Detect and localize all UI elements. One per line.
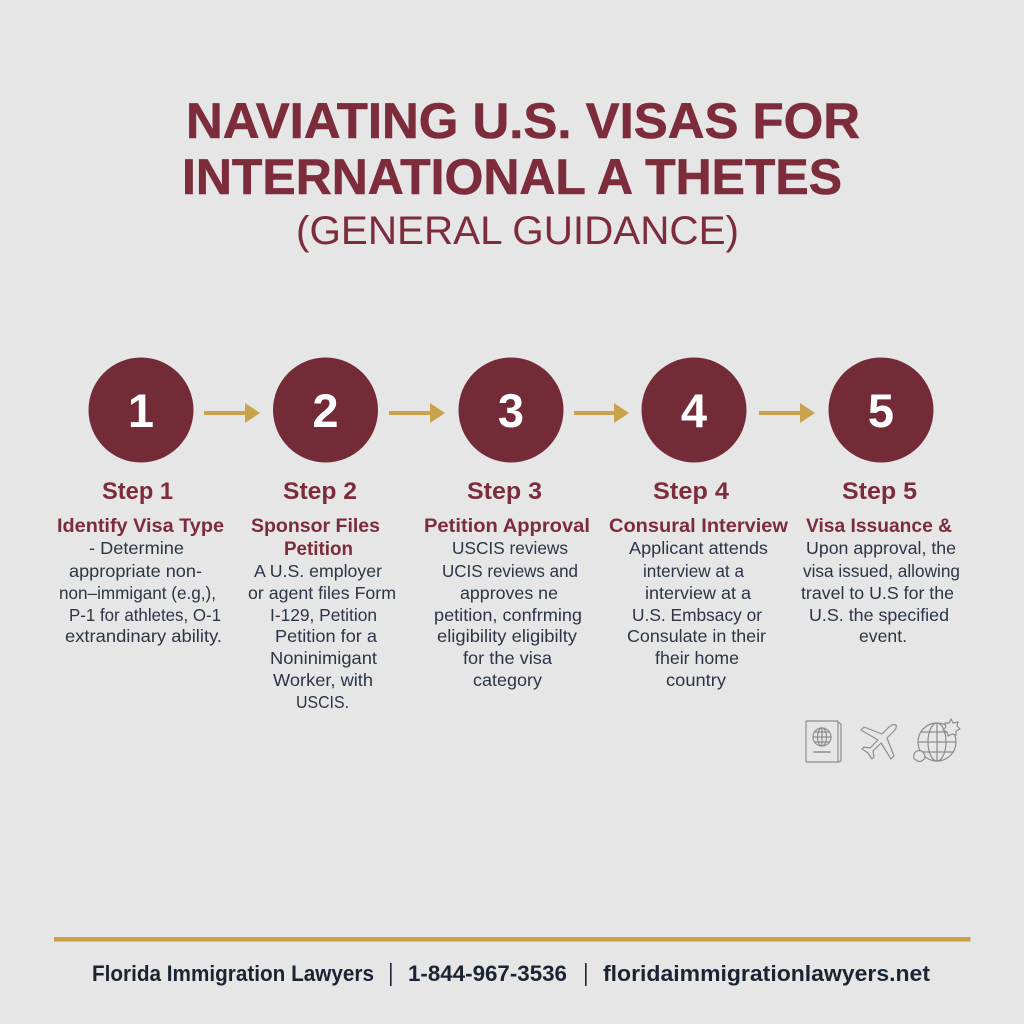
step 2 text: [248, 478, 396, 712]
step 2 text: or agent files Form: [248, 583, 396, 603]
icon: passport: [806, 721, 841, 762]
title: INTERNATIONAL A THETES: [182, 149, 842, 205]
step 3 text: eligibility eligibilty: [437, 626, 577, 646]
step 2 text: Sponsor Files: [251, 515, 380, 537]
step 4 text: interview at a: [643, 561, 744, 581]
step 3 text: category: [473, 670, 542, 690]
step 1 text: Identify Visa Type: [57, 515, 224, 537]
step 4 text: fheir home: [655, 648, 739, 668]
step 4 text: country: [666, 670, 726, 690]
step 5 text: [801, 478, 960, 646]
step 1 text: non–immigant (e.g,),: [59, 583, 216, 603]
step 5 text: travel to U.S for the: [801, 583, 954, 603]
footer contact line: 1-844-967-3536: [408, 961, 567, 986]
footer rule: [54, 937, 970, 942]
step 2 text: Petition: [284, 538, 353, 560]
step 1 text: [57, 478, 224, 646]
step 5 text: Visa Issuance &: [806, 515, 952, 537]
step 2 text: I-129, Petition: [270, 605, 377, 625]
step 1 text: appropriate non-: [69, 561, 202, 581]
icon: airplane: [861, 725, 896, 759]
title: NAVIATING U.S. VISAS FOR: [186, 93, 860, 149]
footer contact line: Florida Immigration Lawyers: [92, 961, 374, 986]
step number circles: 1: [128, 384, 154, 437]
subtitle: (GENERAL GUIDANCE): [296, 209, 739, 253]
step 1 text: - Determine: [89, 538, 184, 558]
step 2 text: Noninimigant: [270, 648, 377, 668]
step 5 text: U.S. the specified: [809, 605, 949, 625]
step number circles: 5: [868, 384, 894, 437]
step 3 text: petition, confrming: [434, 605, 582, 625]
step 3 text: approves ne: [460, 583, 558, 603]
step 1 text: extrandinary ability.: [65, 626, 222, 646]
step 3 text: for the visa: [463, 648, 552, 668]
title: [182, 93, 860, 205]
step 4 text: Step 4: [653, 478, 730, 505]
step 4 text: [609, 478, 789, 690]
step number circles: 4: [681, 384, 707, 437]
step 4 text: U.S. Embsacy or: [632, 605, 762, 625]
step 4 text: Consulate in their: [627, 626, 766, 646]
step number circles: 3: [498, 384, 524, 437]
step 2 text: Step 2: [283, 478, 357, 505]
step 2 text: USCIS.: [296, 692, 349, 712]
step 1 text: Step 1: [102, 478, 173, 505]
step 3 text: [424, 478, 590, 690]
step number circles: [88, 358, 934, 462]
step 4 text: Consural Interview: [609, 515, 789, 537]
step 4 text: interview at a: [645, 583, 751, 603]
step 1 text: P-1 for athletes, O-1: [69, 605, 221, 625]
step 2 text: Petition for a: [275, 626, 377, 646]
arrows between steps: [204, 403, 815, 423]
step 3 text: USCIS reviews: [452, 538, 568, 558]
step 3 text: Step 3: [467, 478, 542, 505]
step 5 text: Upon approval, the: [806, 538, 956, 558]
step 5 text: visa issued, allowing: [803, 561, 960, 581]
footer contact line: floridaimmigrationlawyers.net: [603, 961, 931, 986]
step 3 text: UCIS reviews and: [442, 561, 578, 581]
step 5 text: Step 5: [842, 478, 917, 505]
step 4 text: Applicant attends: [629, 538, 768, 558]
step 5 text: event.: [859, 626, 907, 646]
footer contact line: [92, 961, 931, 986]
step 3 text: Petition Approval: [424, 515, 590, 537]
icon: globe with star: [914, 719, 960, 762]
step 2 text: Worker, with: [273, 670, 373, 690]
step 2 text: A U.S. employer: [254, 561, 382, 581]
step number circles: 2: [312, 384, 339, 437]
